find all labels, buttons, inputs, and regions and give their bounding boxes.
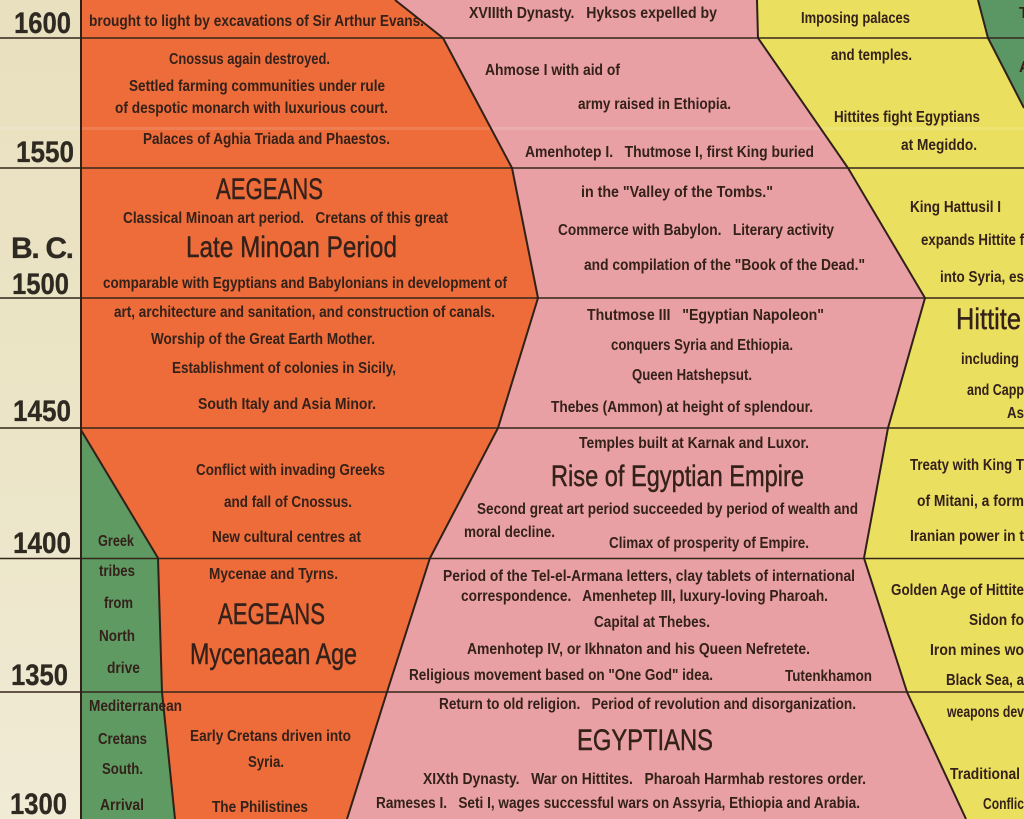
text: Greek tribes column: Arrival: [100, 797, 144, 814]
text: Aegeans, Late Minoan Period: and fall of Cnossus.: [224, 494, 352, 511]
text: Hittites column: Imposing palaces: [801, 10, 910, 27]
text: Aegeans, Late Minoan Period: comparable with Egyptians and Babylonians in development of: [103, 275, 508, 292]
text: Aegeans, Late Minoan Period: [89, 13, 508, 546]
text: Egyptians, XIXth Dynasty: Rameses I. Seti I, wages successful wars on Assyria, Ethiopia and Arabia.: [376, 795, 860, 812]
text: Greek tribes column: drive: [107, 660, 140, 677]
text: Aegeans, Late Minoan Period: Classical Minoan art period. Cretans of this great: [123, 210, 448, 227]
text: Egyptians, upper band: in the "Valley of the Tombs.": [581, 184, 773, 201]
date axis labels: 1450: [13, 395, 71, 428]
text: Aegeans, Mycenaean Age: Mycenaean Age: [190, 638, 357, 671]
band: Egyptians (pink): [347, 0, 966, 819]
text: Aegeans, Late Minoan Period: Worship of the Great Earth Mother.: [151, 331, 375, 348]
text: Egyptians, upper band: Ahmose I with aid of: [485, 62, 621, 79]
text: Greek tribes column: South.: [102, 761, 143, 778]
text: Aegeans, Late Minoan Period: Palaces of Aghia Triada and Phaestos.: [143, 131, 390, 148]
date axis labels: 1500: [12, 268, 69, 301]
text: Rise of Egyptian Empire: Temples built at Karnak and Luxor.: [579, 435, 809, 452]
text: Aegeans, Late Minoan Period: AEGEANS: [216, 173, 323, 206]
text: Greek tribes column: Greek: [98, 533, 134, 550]
text: Hittites column: [801, 10, 1024, 813]
text: Hittites column: King Hattusil I: [910, 199, 1001, 216]
text: Egyptians, Amarna period: Amenhotep IV, or Ikhnaton and his Queen Nefretete.: [467, 641, 810, 658]
band: far-right green civilisation: [978, 0, 1024, 108]
text: Greek tribes column: Mediterranean: [89, 698, 182, 715]
text: Hittites column: Hittites fight Egyptians: [834, 109, 980, 126]
text: Rise of Egyptian Empire: Rise of Egyptian Empire: [551, 460, 804, 493]
text: Greek tribes column: tribes: [99, 563, 135, 580]
text: Egyptians, upper band: Thebes (Ammon) at height of splendour.: [551, 399, 813, 416]
text: Aegeans, Mycenaean Age: [190, 566, 357, 816]
text: Greek tribes column: North: [99, 628, 135, 645]
text: Aegeans, Mycenaean Age: AEGEANS: [218, 598, 325, 631]
panel: date axis background: [0, 0, 82, 819]
text: Egyptians, upper band: Queen Hatshepsut.: [632, 367, 752, 384]
date axis labels: 1550: [16, 136, 74, 169]
date axis labels: 1400: [13, 527, 71, 560]
text: Rise of Egyptian Empire: Second great art period succeeded by period of wealth and: [477, 501, 858, 518]
text: Egyptians, upper band: army raised in Ethiopia.: [578, 96, 731, 113]
text: Egyptians, Amarna period: Tutenkhamon: [785, 668, 872, 685]
band: Greek tribes (green): [81, 430, 175, 819]
text: Hittites column: at Megiddo.: [901, 137, 977, 154]
text: Aegeans, Late Minoan Period: Late Minoan Period: [186, 231, 397, 264]
text: Aegeans, Late Minoan Period: Settled farming communities under rule: [129, 78, 385, 95]
text: Egyptians, upper band: Amenhotep I. Thutmose I, first King buried: [525, 144, 814, 161]
text: far-right green column: [1019, 5, 1024, 76]
text: Egyptians, Amarna period: Religious movement based on "One God" idea.: [409, 667, 713, 684]
text: Aegeans, Late Minoan Period: Cnossus again destroyed.: [169, 51, 330, 68]
text: Aegeans, Late Minoan Period: Establishment of colonies in Sicily,: [172, 360, 396, 377]
text: Egyptians, Amarna period: Capital at Thebes.: [594, 614, 710, 631]
text: Egyptians, upper band: Thutmose III "Egyptian Napoleon": [587, 307, 824, 324]
text: Rise of Egyptian Empire: moral decline.: [464, 524, 555, 541]
page fold highlight: [0, 127, 1024, 130]
text: Egyptians, Amarna period: Period of the Tel-el-Armana letters, clay tablets of international: [443, 568, 855, 585]
text: Egyptians, Amarna period: [409, 568, 872, 685]
text: Rise of Egyptian Empire: [464, 435, 858, 552]
band: Aegeans (orange): [81, 0, 538, 819]
text: Hittites column: and temples.: [831, 47, 912, 64]
text: Egyptians, XIXth Dynasty: Return to old religion. Period of revolution and disorganization.: [439, 696, 856, 713]
text: Aegeans, Late Minoan Period: brought to light by excavations of Sir Arthur Evans.: [89, 13, 424, 30]
text: Greek tribes column: from: [104, 595, 133, 612]
date axis labels: 1600: [14, 7, 71, 40]
text: Greek tribes column: [89, 533, 182, 814]
text: Aegeans, Late Minoan Period: art, architecture and sanitation, and construction of canals.: [114, 304, 495, 321]
text: Greek tribes column: Cretans: [98, 731, 147, 748]
text: Egyptians, XIXth Dynasty: EGYPTIANS: [577, 724, 713, 757]
text: Aegeans, Mycenaean Age: Early Cretans driven into: [190, 728, 351, 745]
text: Egyptians, XIXth Dynasty: [376, 696, 866, 812]
text: Aegeans, Late Minoan Period: South Italy and Asia Minor.: [198, 396, 376, 413]
text: Aegeans, Mycenaean Age: Syria.: [248, 754, 284, 771]
text: Egyptians, upper band: [469, 5, 865, 416]
text: Egyptians, upper band: and compilation of the "Book of the Dead.": [584, 257, 865, 274]
text: Aegeans, Mycenaean Age: Mycenae and Tyrns.: [209, 566, 338, 583]
text: Egyptians, upper band: XVIIIth Dynasty. Hyksos expelled by: [469, 5, 717, 22]
text: Aegeans, Late Minoan Period: Conflict with invading Greeks: [196, 462, 385, 479]
date axis labels: B. C.: [11, 232, 74, 265]
text: Aegeans, Late Minoan Period: of despotic monarch with luxurious court.: [115, 100, 388, 117]
text: Aegeans, Late Minoan Period: New cultural centres at: [212, 529, 361, 546]
text: Egyptians, upper band: Commerce with Babylon. Literary activity: [558, 222, 834, 239]
text: Egyptians, XIXth Dynasty: XIXth Dynasty. War on Hittites. Pharoah Harmhab restores order.: [423, 771, 866, 788]
date axis labels: 1350: [11, 659, 68, 692]
text: Egyptians, upper band: conquers Syria and Ethiopia.: [611, 337, 793, 354]
text: Rise of Egyptian Empire: Climax of prosperity of Empire.: [609, 535, 809, 552]
text: Aegeans, Mycenaean Age: The Philistines: [212, 799, 308, 816]
date axis labels: [10, 7, 74, 819]
band: Hittites (yellow): [757, 0, 1024, 819]
text: Egyptians, Amarna period: correspondence. Amenhetep III, luxury-loving Pharoah.: [461, 588, 828, 605]
